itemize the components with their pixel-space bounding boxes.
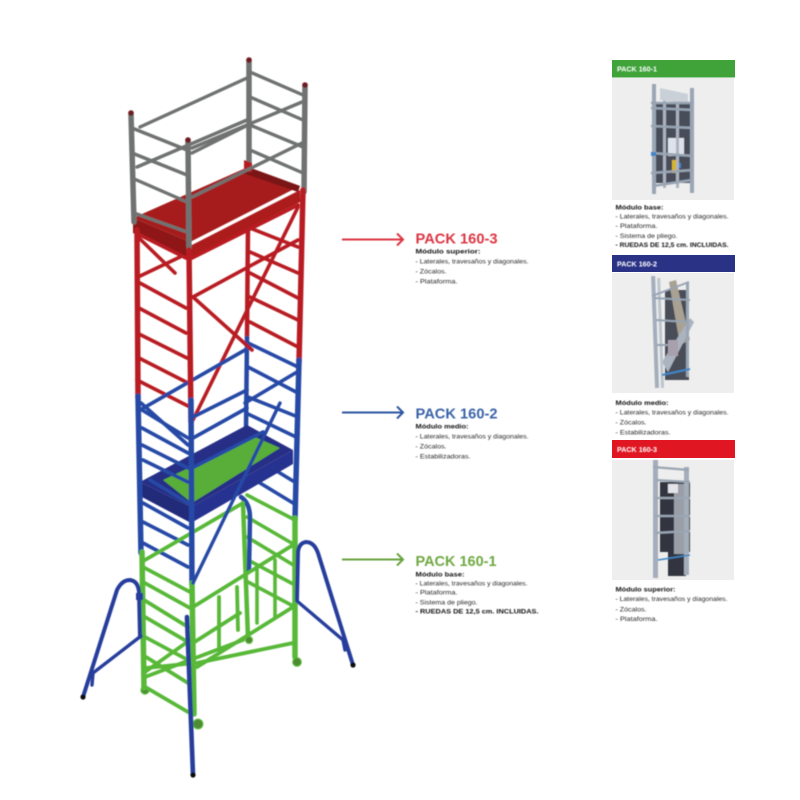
list: módulo base: - Laterales, travesaños y diagonales. — [616, 214, 729, 220]
list: módulo medio: Módulo medio: — [416, 424, 468, 430]
list: módulo base: - RUEDAS DE 12,5 cm. INCLUIDAS. — [416, 608, 539, 616]
header: green: PACK 160-1 — [617, 64, 658, 74]
list: módulo base: - Plataforma. — [616, 223, 658, 230]
heading: PACK 160-2: PACK 160-2 — [416, 406, 498, 422]
heading: PACK 160-1: PACK 160-1 — [416, 553, 496, 570]
green front frames — [142, 503, 293, 712]
list: módulo base: Módulo base: — [616, 204, 664, 212]
list: módulo medio: Módulo medio: — [616, 400, 668, 407]
rear wheels — [141, 637, 301, 729]
list: módulo base: Módulo base: — [416, 572, 464, 578]
list: módulo superior — [616, 586, 728, 623]
list: módulo base: - RUEDAS DE 12,5 cm. INCLUIDAS. — [616, 242, 729, 249]
list: módulo superior: - Plataforma. — [616, 616, 658, 623]
panel: PACK 160-1 card — [612, 60, 735, 249]
list: módulo medio — [616, 400, 729, 436]
callout: PACK 160-2 — [342, 406, 529, 460]
back right frame: green section — [243, 495, 295, 657]
back right frame: red section — [247, 190, 303, 362]
list: módulo medio: - Zócalos. — [616, 420, 647, 426]
grey front frames — [131, 102, 302, 232]
list: módulo superior: Módulo superior: — [616, 586, 676, 594]
list: módulo medio: - Estabilizadoras. — [416, 454, 471, 460]
list: módulo superior — [416, 248, 529, 286]
arrow: green — [342, 554, 403, 566]
back right frame: grey top section — [137, 61, 305, 192]
red front frames — [137, 205, 298, 420]
list: módulo superior: Módulo superior: — [416, 248, 480, 256]
panel: PACK 160-2 card — [612, 255, 735, 436]
front stabilizer — [187, 617, 196, 778]
header: red — [612, 440, 735, 458]
list: módulo base — [616, 204, 729, 249]
list: módulo medio: - Zócalos. — [416, 444, 447, 450]
list: módulo medio — [416, 424, 529, 460]
list: módulo base: - Sistema de pliego. — [616, 233, 678, 240]
list: módulo base: - Plataforma. — [416, 590, 458, 596]
blue platform — [140, 425, 293, 523]
left stabilizer — [80, 580, 143, 700]
list: módulo medio: - Laterales, travesaños y diagonales. — [416, 434, 529, 440]
photo: packed upper module — [612, 460, 734, 580]
header: navy: PACK 160-2 — [617, 260, 657, 268]
arrow: blue — [342, 406, 403, 418]
callout: PACK 160-3 — [342, 230, 529, 286]
list: módulo medio: - Laterales, travesaños y diagonales. — [616, 410, 729, 416]
photo: packed base module — [612, 78, 734, 200]
list: módulo base — [416, 572, 539, 616]
callout: PACK 160-1 — [342, 553, 539, 616]
red platform — [133, 160, 300, 258]
blue front frames — [138, 350, 263, 567]
list: módulo superior: - Laterales, travesaños y diagonales. — [416, 258, 529, 266]
list: módulo superior: - Plataforma. — [416, 278, 458, 286]
header: navy — [612, 255, 735, 272]
blue folding strut — [241, 497, 250, 570]
heading: PACK 160-3: PACK 160-3 — [416, 230, 498, 248]
list: módulo superior: - Laterales, travesaños y diagonales. — [616, 596, 728, 603]
back right frame: blue section — [245, 338, 299, 520]
list: módulo superior: - Zócalos. — [416, 268, 447, 276]
header: green — [612, 60, 735, 78]
list: módulo medio: - Estabilizadoras. — [616, 430, 671, 436]
list: módulo base: - Laterales, travesaños y diagonales. — [416, 580, 528, 588]
scaffold tower illustration — [80, 57, 356, 778]
post end caps — [128, 57, 308, 143]
list: módulo base: - Sistema de pliego. — [416, 600, 478, 606]
header: red: PACK 160-3 — [617, 445, 657, 454]
photo: packed middle module — [612, 273, 734, 393]
panel: PACK 160-3 card — [612, 440, 735, 623]
list: módulo superior: - Zócalos. — [616, 606, 647, 614]
right stabilizer — [297, 542, 356, 668]
arrow: red — [342, 234, 403, 246]
central front post — [188, 141, 280, 714]
